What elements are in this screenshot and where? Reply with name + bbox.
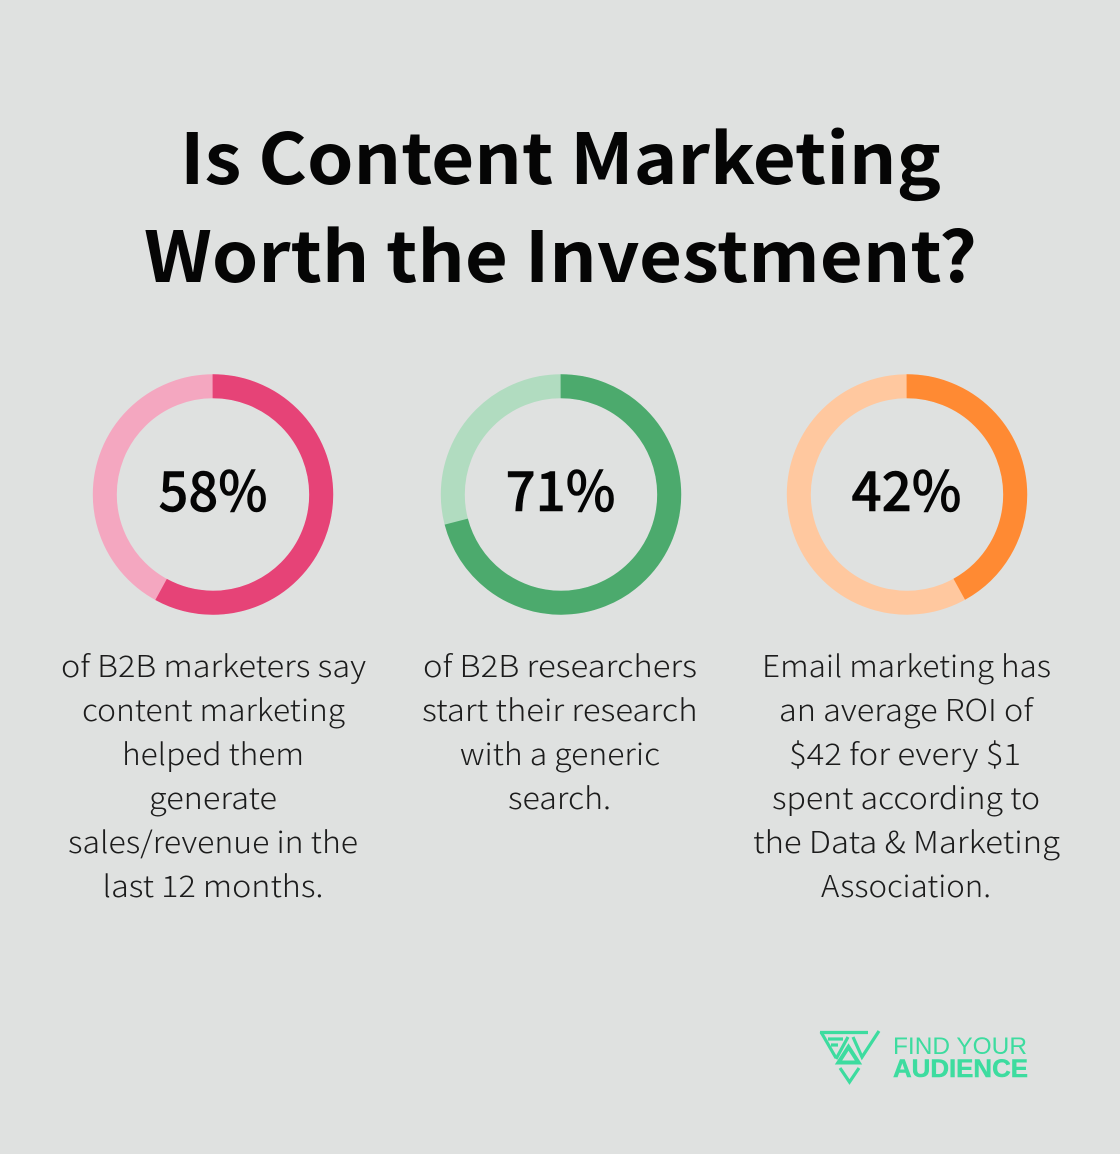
text block: 58% description [61,642,366,906]
panel: 42% stat [753,386,1060,906]
title [144,104,977,303]
donut chart: 58% [105,386,321,603]
title: Worth the Investment? [144,202,977,303]
text block: 42% description: Association. [821,862,991,906]
text block: 71% description: start their research [422,686,698,730]
logo wordmark: FIND YOUR [893,1033,1027,1060]
donut chart: 58%: 58% [158,447,268,527]
panel: 58% stat [61,386,366,906]
text block: 58% description: last 12 months. [102,862,324,906]
text block: 58% description: helped them [122,730,304,774]
text block: 71% description: with a generic [460,730,660,774]
panel: 71% stat [422,386,698,818]
donut chart: 42%: 42% [852,447,962,527]
donut chart: 42% [799,386,1015,603]
text block: 58% description: generate [149,774,277,818]
logo: Find Your Audience [820,1031,1028,1083]
text block: 71% description: of B2B researchers [423,642,697,686]
text block: 71% description: search. [508,774,611,818]
text block: 58% description: of B2B marketers say [61,642,366,686]
text block: 42% description: an average ROI of [779,686,1034,730]
title: Is Content Marketing [180,104,941,205]
text block: 58% description: content marketing [82,686,345,730]
text block: 42% description: $42 for every $1 [789,730,1021,774]
text block: 71% description [422,642,698,818]
text block: 42% description: the Data & Marketing [753,818,1060,862]
logo wordmark: AUDIENCE [893,1055,1028,1083]
text block: 42% description [753,642,1060,906]
donut chart: 71%: 71% [506,447,616,527]
text block: 42% description: Email marketing has [762,642,1051,686]
text block: 58% description: sales/revenue in the [68,818,358,862]
icon: triangle logo mark [820,1031,879,1082]
text block: 42% description: spent according to [772,774,1040,818]
logo wordmark [893,1033,1028,1083]
donut chart: 71% [453,386,669,603]
